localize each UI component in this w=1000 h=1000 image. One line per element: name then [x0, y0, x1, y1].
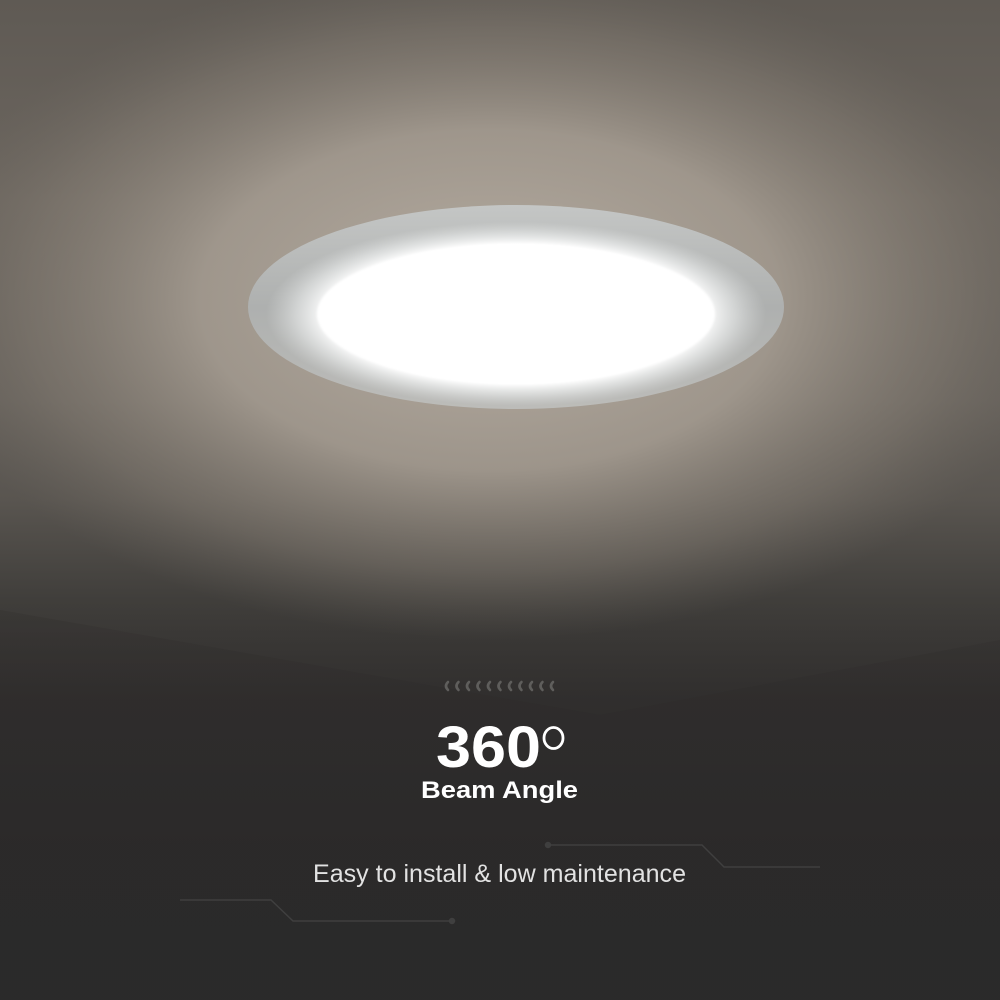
icon: recessed LED panel lamp: [248, 205, 784, 409]
chevron row: [446, 682, 553, 690]
lamp light surface: [317, 245, 715, 383]
caption: Easy to install & low maintenance: [313, 860, 686, 888]
lamp glow on trim: [266, 222, 766, 406]
heading: 360 degrees: 360: [436, 715, 541, 780]
degree mark: [544, 728, 563, 748]
subheading: Beam Angle: Beam Angle: [421, 777, 578, 804]
decorative circuit line left: [180, 900, 454, 924]
decorative circuit line right: [546, 842, 820, 867]
lamp outer trim: [248, 205, 784, 409]
